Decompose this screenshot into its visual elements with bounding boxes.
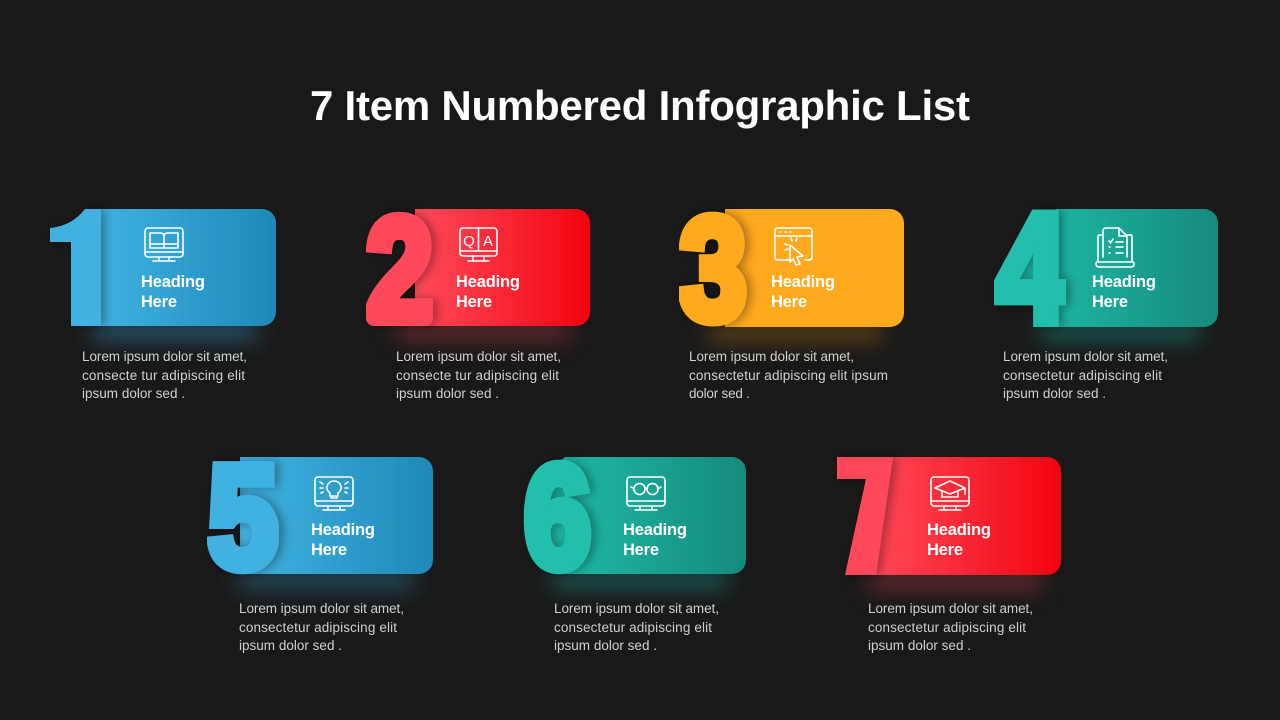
item 6: teal xyxy=(524,436,746,653)
description: consectetur adipiscing elit xyxy=(1003,368,1162,383)
description: ipsum dolor sed . xyxy=(1003,386,1106,401)
description xyxy=(82,349,247,401)
icon: graduation cap on monitor xyxy=(931,477,969,510)
description: ipsum dolor sed . xyxy=(868,638,971,653)
heading: Here xyxy=(311,541,347,559)
card panel xyxy=(725,209,904,327)
number 1: 1 xyxy=(38,180,122,356)
description: dolor sed . xyxy=(689,386,750,401)
description: consectetur adipiscing elit xyxy=(868,620,1026,635)
heading: Here xyxy=(927,541,963,559)
number 2: 2 xyxy=(366,187,433,353)
heading: Here xyxy=(456,293,492,311)
number 5: 5 xyxy=(208,436,278,598)
glow xyxy=(238,571,413,589)
card panel xyxy=(415,209,590,326)
glow xyxy=(552,571,727,589)
icon: glasses on monitor xyxy=(627,477,665,510)
glow xyxy=(708,323,883,341)
description: consectetur adipiscing elit xyxy=(554,620,712,635)
heading: Heading xyxy=(456,273,520,291)
icon: QA on monitor: Q xyxy=(463,233,475,250)
description: consecte tur adipiscing elit xyxy=(396,368,559,383)
item 1: blue xyxy=(50,209,276,401)
description: Lorem ipsum dolor sit amet, xyxy=(868,601,1033,616)
heading: Here xyxy=(1092,293,1128,311)
icon: document on laptop xyxy=(1096,228,1134,267)
description: Lorem ipsum dolor sit amet, xyxy=(554,601,719,616)
description xyxy=(396,349,561,401)
glow xyxy=(868,572,1043,590)
description: Lorem ipsum dolor sit amet, xyxy=(239,601,404,616)
heading: Heading xyxy=(623,521,687,539)
heading: Heading xyxy=(141,273,205,291)
heading: Heading xyxy=(1092,273,1156,291)
number 3: 3 xyxy=(680,188,746,351)
icon: QA on monitor: A xyxy=(483,233,493,250)
icon: QA on monitor xyxy=(460,228,497,261)
heading xyxy=(623,521,687,559)
glow xyxy=(1040,323,1200,341)
description xyxy=(689,349,888,401)
description: ipsum dolor sed . xyxy=(554,638,657,653)
card panel xyxy=(537,457,746,574)
icon: book on monitor xyxy=(145,228,183,261)
description: Lorem ipsum dolor sit amet, xyxy=(396,349,561,364)
description: consectetur adipiscing elit ipsum xyxy=(689,368,888,383)
number 4: 4 xyxy=(995,181,1067,356)
description xyxy=(1003,349,1168,401)
description xyxy=(554,601,719,653)
heading: Heading xyxy=(311,521,375,539)
description xyxy=(868,601,1033,653)
card panel xyxy=(868,457,1061,575)
description: ipsum dolor sed . xyxy=(396,386,499,401)
heading xyxy=(771,273,835,311)
heading: Here xyxy=(623,541,659,559)
title: 7 Item Numbered Infographic List xyxy=(310,82,970,129)
heading: Heading xyxy=(771,273,835,291)
item 4: teal xyxy=(994,209,1218,401)
heading xyxy=(456,273,520,311)
card panel xyxy=(240,457,433,574)
description: Lorem ipsum dolor sit amet, xyxy=(82,349,247,364)
item 5: blue xyxy=(208,436,433,653)
number 7: 7 xyxy=(833,434,899,602)
description: Lorem ipsum dolor sit amet, xyxy=(1003,349,1168,364)
heading: Heading xyxy=(927,521,991,539)
heading xyxy=(1092,273,1156,311)
glow xyxy=(92,322,257,340)
description xyxy=(239,601,404,653)
glow xyxy=(395,322,570,340)
description: consectetur adipiscing elit xyxy=(239,620,397,635)
description: ipsum dolor sed . xyxy=(82,386,185,401)
card panel xyxy=(1012,209,1218,327)
card panel xyxy=(92,209,276,326)
description: ipsum dolor sed . xyxy=(239,638,342,653)
number 6: 6 xyxy=(524,436,591,599)
icon: light bulb on monitor xyxy=(315,477,353,510)
item 2: red xyxy=(366,209,590,401)
description: Lorem ipsum dolor sit amet, xyxy=(689,349,854,364)
heading: Here xyxy=(771,293,807,311)
item 3: orange xyxy=(679,209,904,398)
description: consecte tur adipiscing elit xyxy=(82,368,245,383)
heading xyxy=(311,521,375,559)
heading xyxy=(927,521,991,559)
heading xyxy=(141,273,205,311)
icon: browser window with cursor xyxy=(775,228,812,265)
item 7: red xyxy=(837,457,1061,653)
heading: Here xyxy=(141,293,177,311)
